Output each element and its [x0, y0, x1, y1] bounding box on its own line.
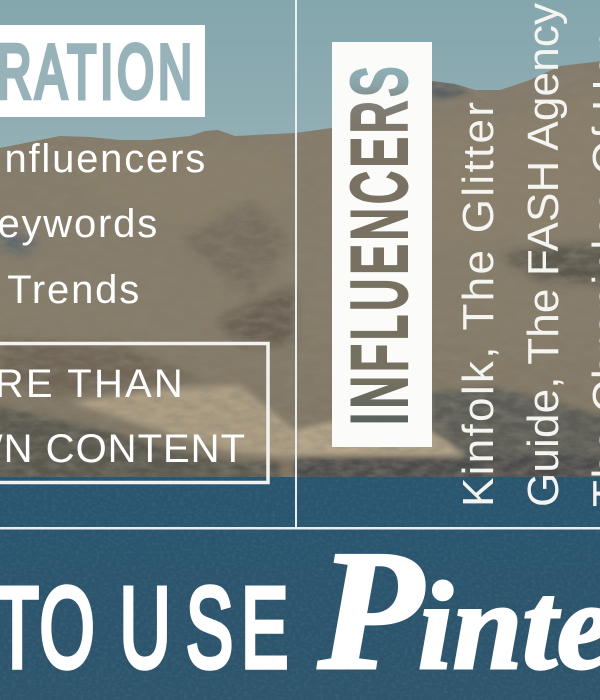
pinterest wordmark: [317, 516, 600, 700]
list of topics: Trends: [7, 268, 141, 312]
frame lines: [0, 0, 600, 530]
list of topics: [0, 137, 207, 312]
panel: inspiration: [0, 25, 268, 482]
panel: influencers: [332, 3, 600, 507]
rotated list of influencers: [454, 3, 600, 507]
heading: influencers: INFLUENCERS: [338, 67, 423, 425]
title: how to use pinterest: [0, 516, 600, 700]
rotated list of influencers: Kinfolk, The Glitter: [454, 102, 503, 507]
callout: more than own content: [0, 344, 268, 482]
rotated list of influencers: Guide, The FASH Agency: [519, 3, 568, 507]
title: how to use pinterest: TO USE: [0, 565, 288, 692]
